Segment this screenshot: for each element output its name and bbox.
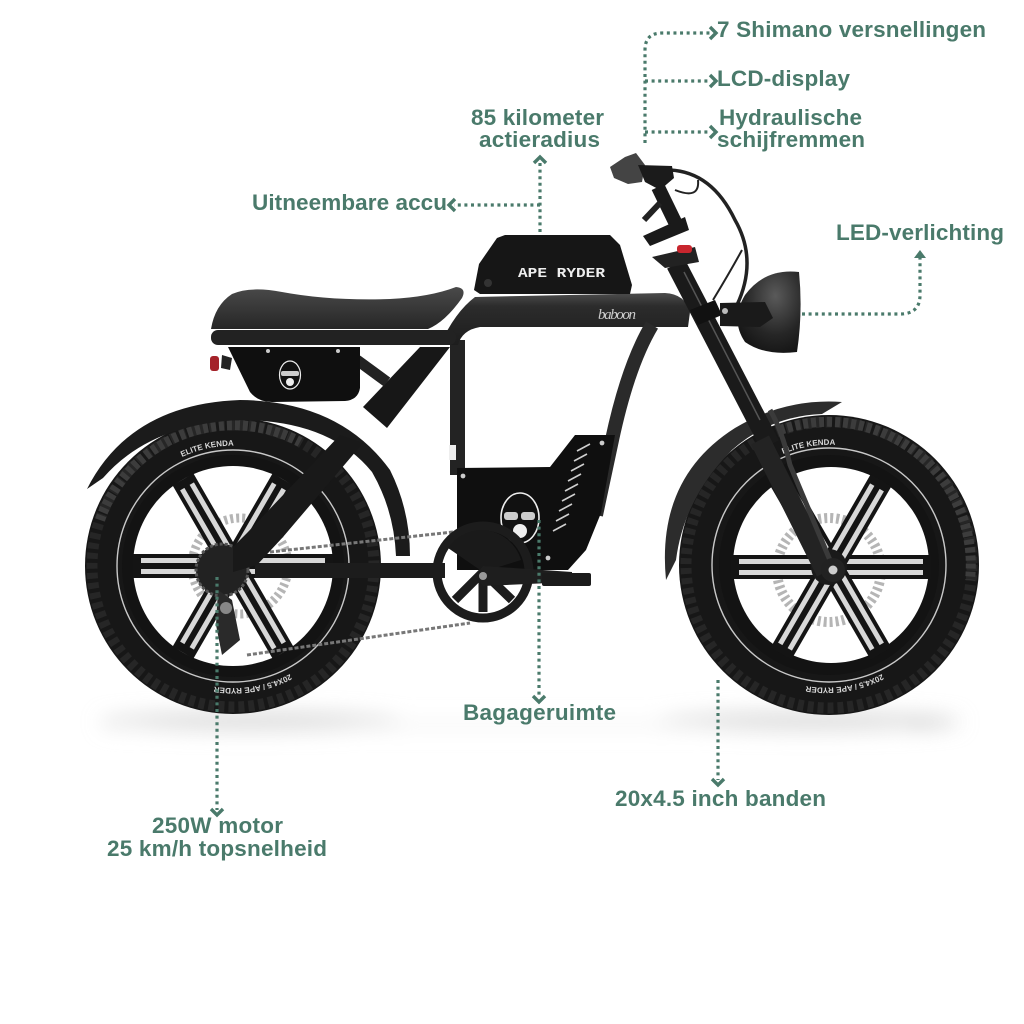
cables [670,170,747,305]
chainstay [255,563,445,578]
bicycle [85,153,979,715]
handlebar and display [610,153,699,268]
fork [676,264,845,582]
callout: LCD-display [645,66,850,91]
down tube [596,325,652,515]
callout: actieradius: 85 kilometer [471,105,604,130]
callout: hydraulische schijfremmen: schijfremmen [717,127,865,152]
crank arm [478,566,572,586]
callout: bagageruimte: Bagageruimte [463,700,616,725]
frame [233,293,690,578]
battery: APE RYDER [518,266,606,282]
callout: banden: 20x4.5 inch banden [615,786,826,811]
callout: uitneembare accu [252,190,540,215]
pedal [542,573,591,586]
callout: motor: 25 km/h topsnelheid [107,836,327,861]
callout: actieradius: actieradius [479,127,600,152]
tail light [210,355,232,371]
front wheel: 20X4.5 / APE RYDER [806,674,884,694]
front fender [665,402,842,580]
callout: 7 Shimano versnellingen [645,17,986,143]
rear cassette and derailleur [196,544,248,655]
callout: motor: 250W motor [152,813,283,838]
crankset and pedal [437,526,591,618]
callout: LED-verlichting [802,220,1004,314]
logo: box [280,361,300,389]
callout: actieradius [471,105,604,232]
rear wheel: ELITE KENDA [180,440,234,457]
front wheel: ELITE KENDA [782,439,835,454]
storage box [228,347,360,402]
rear fender [87,400,410,556]
front wheel [679,415,979,715]
callout: hydraulische schijfremmen [645,105,865,152]
seat stay [233,435,363,572]
callout: banden [615,680,826,811]
logo: plate [501,493,539,543]
callout: LED-verlichting: LED-verlichting [836,220,1004,245]
callout: motor [107,577,327,861]
ground shadow [100,713,960,731]
callout: uitneembare accu: Uitneembare accu [252,190,447,215]
drive chain [247,532,470,655]
seat [211,287,464,345]
seat post [450,340,465,475]
callout: bagageruimte [463,520,616,725]
rear wheel: 20X4.5 / APE RYDER [214,674,292,694]
headlight [720,271,801,353]
luggage plate [457,435,615,570]
top tube [440,293,690,345]
model name: baboon [598,307,636,323]
rear wheel [85,420,381,714]
callout: LCD-display: LCD-display [717,66,850,91]
shock [363,347,450,428]
battery [474,235,632,294]
callout: hydraulische schijfremmen: Hydraulische [719,105,862,130]
callout: 7 Shimano versnellingen: 7 Shimano versnellingen [717,17,986,42]
